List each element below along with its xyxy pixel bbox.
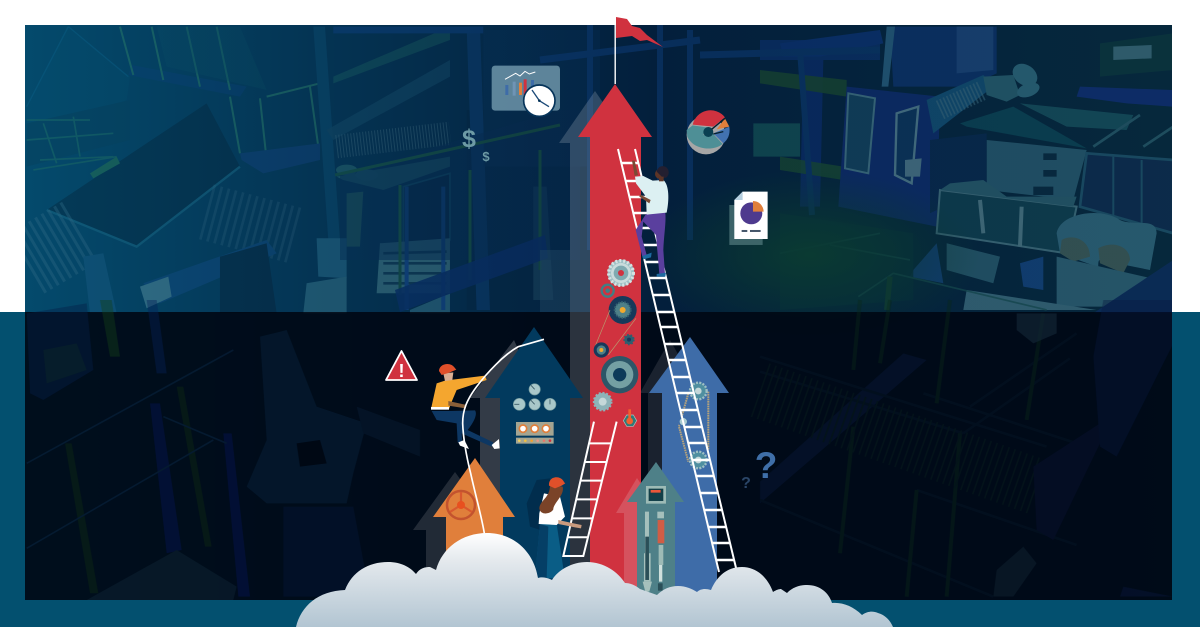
bottom teal band xyxy=(0,312,1200,627)
purple trousers xyxy=(636,211,666,274)
cloud bank xyxy=(296,533,893,627)
light red arrow shadow xyxy=(616,478,660,596)
white shirt xyxy=(635,176,668,215)
gear: small navy xyxy=(594,342,609,358)
icon: hex knob xyxy=(623,409,637,426)
arrow shadow: behind blue arrow xyxy=(640,340,700,590)
icon: question marks: ? xyxy=(755,445,777,486)
trousers xyxy=(536,524,563,578)
small white ladder xyxy=(563,422,617,556)
blue arrow gears and chain xyxy=(679,383,708,468)
navy arrow xyxy=(485,327,583,590)
gear: lower toothed xyxy=(594,393,611,410)
orange sweater xyxy=(431,376,487,409)
teal arrow machine parts xyxy=(643,486,666,592)
gears on red arrow xyxy=(594,261,638,426)
shoes xyxy=(458,439,500,449)
icon: report document xyxy=(729,192,768,245)
red arrow xyxy=(578,84,652,592)
icon: donut chart xyxy=(687,110,730,154)
gear: large flywheel xyxy=(601,356,638,393)
dim wash on the upper photo xyxy=(25,25,1172,312)
dark overlay on the lower photo xyxy=(25,300,1173,600)
arrow shadow: behind orange arrow xyxy=(413,472,497,590)
arrow shadow: behind navy arrow xyxy=(470,340,540,590)
icon: dollar signs: $ xyxy=(482,149,490,164)
navy legs xyxy=(432,410,493,447)
shirt xyxy=(539,493,565,525)
blue arrow xyxy=(649,337,729,596)
icon: dollar signs xyxy=(462,125,490,164)
flag on top of red arrow xyxy=(614,17,663,84)
teal arrow xyxy=(627,462,684,598)
icon: chart panel with clock xyxy=(492,66,560,116)
icon: warning triangle xyxy=(386,351,417,381)
navy arrow gauges xyxy=(513,384,556,444)
arm xyxy=(558,520,582,528)
shoes xyxy=(642,253,666,277)
orange arrow steering wheel xyxy=(447,491,475,519)
icon: dollar signs: $ xyxy=(462,125,476,153)
orange arrow xyxy=(433,458,515,590)
drive belt xyxy=(595,310,636,355)
rope xyxy=(463,339,544,533)
brown forearm xyxy=(448,401,467,408)
icon: question marks xyxy=(741,445,777,492)
gear: light toothed xyxy=(609,261,633,285)
icon: question marks: ? xyxy=(741,475,751,492)
person climbing the big ladder xyxy=(632,161,669,277)
hair xyxy=(539,485,563,513)
man on the rope xyxy=(431,364,500,449)
head and helmet xyxy=(443,372,453,381)
woman with helmet xyxy=(527,477,582,578)
arrow shadow: behind red arrow xyxy=(559,91,631,590)
big white ladder xyxy=(618,149,737,572)
helmet xyxy=(549,477,565,488)
icon: warning triangle: ! xyxy=(398,361,404,381)
white background strips beside the photo xyxy=(0,0,1200,312)
gear: tiny cog xyxy=(624,335,634,344)
gear: dark with yellow hub xyxy=(609,296,637,324)
arms and head xyxy=(632,161,651,203)
gear: small teal xyxy=(602,285,614,297)
